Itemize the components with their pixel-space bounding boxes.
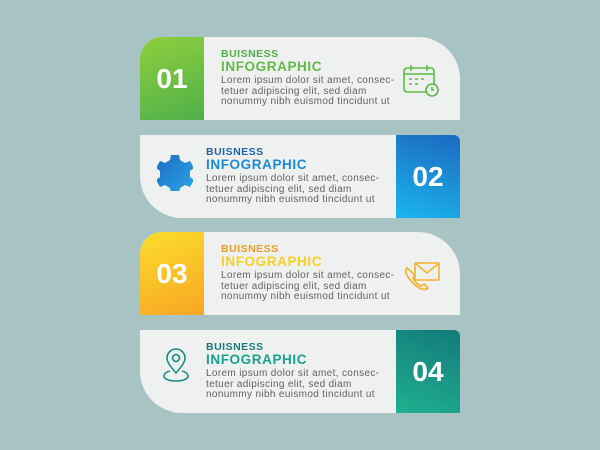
text block 02: INFOGRAPHIC <box>206 156 307 172</box>
number 03: 03 <box>156 258 188 289</box>
text block 03: BUISNESS <box>221 243 279 255</box>
number 03 <box>140 232 204 315</box>
text block 01: Lorem ipsum dolor sit amet, consec- <box>221 75 394 86</box>
icon: calendar <box>403 65 439 97</box>
number 02 <box>396 135 460 218</box>
text block 04: nonummy nibh euismod tincidunt ut <box>206 389 375 400</box>
text block 01: INFOGRAPHIC <box>221 58 322 74</box>
number 01 <box>140 37 204 120</box>
text block 04 <box>206 341 379 400</box>
text block 03 <box>221 243 394 302</box>
number 04 <box>396 330 460 413</box>
text block 04: Lorem ipsum dolor sit amet, consec- <box>206 368 379 379</box>
text block 02: Lorem ipsum dolor sit amet, consec- <box>206 173 379 184</box>
icon: location pin <box>163 348 189 382</box>
text block 04: INFOGRAPHIC <box>206 352 307 366</box>
text block 04: tetuer adipiscing elit, sed diam <box>206 378 352 390</box>
card 01 <box>140 37 460 120</box>
text block 02: nonummy nibh euismod tincidunt ut <box>206 194 375 205</box>
text block 04: BUISNESS <box>206 341 264 353</box>
text block 02: BUISNESS <box>206 146 264 158</box>
text block 03: INFOGRAPHIC <box>221 254 322 268</box>
card 02 <box>140 135 460 218</box>
text block 01: nonummy nibh euismod tincidunt ut <box>221 96 390 107</box>
card 04 <box>140 330 460 413</box>
text block 01: tetuer adipiscing elit, sed diam <box>221 86 367 96</box>
text block 01: BUISNESS <box>221 48 279 60</box>
number 02: 02 <box>412 161 444 192</box>
text block 02 <box>206 146 379 205</box>
text block 03: nonummy nibh euismod tincidunt ut <box>221 291 390 302</box>
text block 02: tetuer adipiscing elit, sed diam <box>206 184 352 194</box>
text block 03: tetuer adipiscing elit, sed diam <box>221 280 367 292</box>
number 04: 04 <box>412 356 444 387</box>
card 03 <box>140 232 460 315</box>
icon: envelope phone <box>405 262 440 290</box>
icon: gear <box>157 155 193 191</box>
text block 01 <box>221 48 394 107</box>
number 01: 01 <box>156 63 188 94</box>
text block 03: Lorem ipsum dolor sit amet, consec- <box>221 270 394 281</box>
